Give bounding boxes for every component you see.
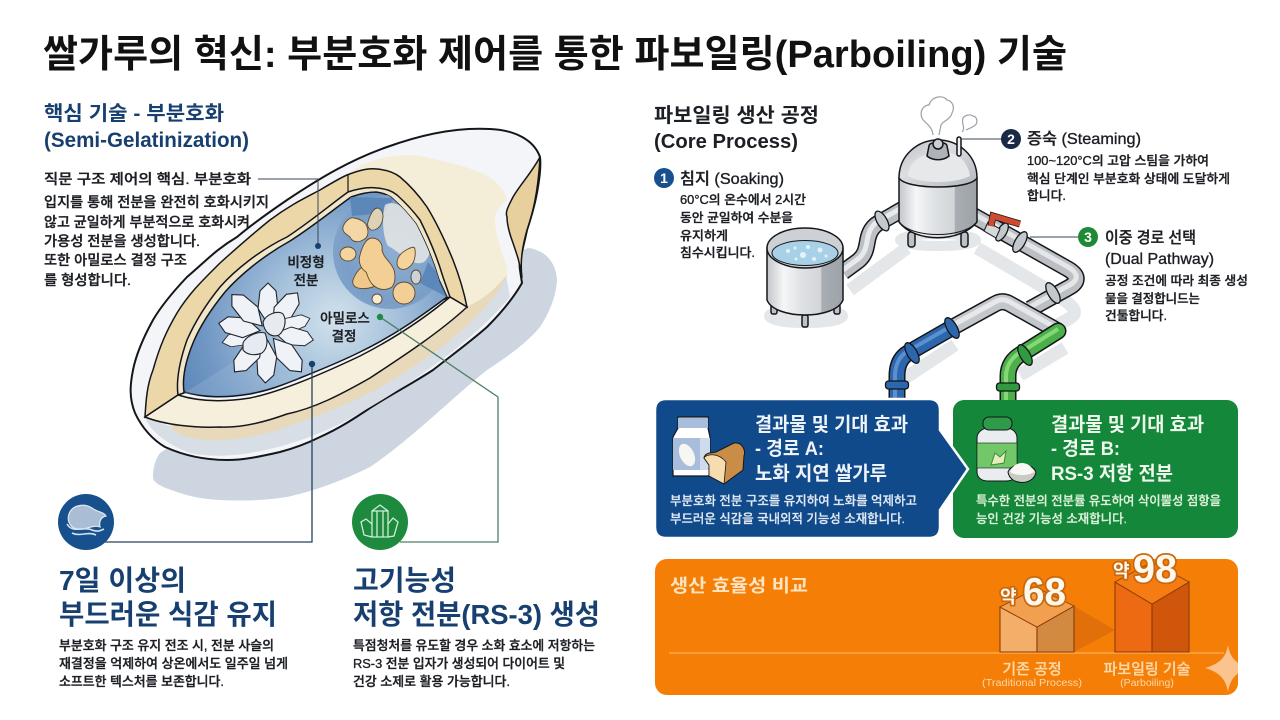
pathway A heading <box>755 414 908 485</box>
text block: resistant starch <box>353 638 595 689</box>
label: amorphous starch: 전분 <box>294 273 318 288</box>
pipe: soak to steam vessel <box>843 203 910 272</box>
text block: resistant starch: RS-3 전분 입자가 생성되어 다이어트 및 <box>353 656 565 671</box>
icon: starch wave <box>58 494 114 550</box>
value: 98 <box>1113 548 1177 591</box>
heading: soft texture <box>59 565 277 630</box>
step 3: dual pathway: 이중 경로 선택 <box>1105 229 1196 247</box>
pathway B heading: - 경로 B: <box>1051 438 1120 460</box>
panel: production efficiency comparison <box>655 548 1250 695</box>
pathway B description: 특수한 전분의 전분률 유도하여 삭이뿔성 점항을 <box>976 494 1221 508</box>
heading: core process: (Core Process) <box>654 131 798 153</box>
text block: semi-gelatinization description: 를 형성합니다. <box>44 272 131 288</box>
step 2: steaming <box>961 129 1230 203</box>
heading: soft texture: 부드러운 식감 유지 <box>59 599 277 630</box>
label: amorphous starch: 비정형 <box>287 255 325 270</box>
label: amylose crystal: 아밀로스 <box>320 311 370 326</box>
steam <box>921 97 977 135</box>
step 1: soaking: 60°C의 온수에서 2시간 <box>680 193 807 207</box>
panel heading: 생산 효율성 비교 <box>670 576 808 596</box>
step 2: steaming: 핵심 단계인 부분호화 상태에 도달하게 <box>1027 171 1230 186</box>
label: amylose crystal: 결정 <box>332 329 356 344</box>
illustration: rice grain cross-section <box>131 129 557 501</box>
label: traditional process <box>982 661 1082 689</box>
soaking tank <box>767 228 843 327</box>
step 2: steaming: 합니다. <box>1027 188 1066 203</box>
bar: traditional process <box>1000 588 1074 652</box>
heading: core technology <box>44 102 249 152</box>
text block: semi-gelatinization description: 또한 아밀로스 결정 구조 <box>44 252 187 268</box>
icon: green crystal <box>352 494 408 550</box>
heading: core process: 파보일링 생산 공정 <box>654 104 819 127</box>
step 2: steaming: 증숙 (Steaming) <box>1027 130 1141 148</box>
heading: resistant starch: 저항 전분(RS-3) 생성 <box>353 599 600 630</box>
pathway B heading: 결과물 및 기대 효과 <box>1051 414 1204 436</box>
sparkle <box>1205 645 1238 692</box>
step 1: soaking: 1 <box>660 170 668 186</box>
step 3: dual pathway: 3 <box>1084 229 1092 245</box>
pathway A heading: 결과물 및 기대 효과 <box>755 414 908 436</box>
label: traditional process: (Traditional Process) <box>982 677 1082 689</box>
heading: resistant starch: 고기능성 <box>353 565 456 596</box>
icon: milk carton and bread <box>673 417 745 484</box>
step 3: dual pathway: (Dual Pathway) <box>1105 251 1214 268</box>
pathway B heading: RS-3 저항 전분 <box>1051 463 1173 485</box>
title: 쌀가루의 혁신: 부분호화 제어를 통한 파보일링(Parboiling) 기술 <box>43 34 1067 76</box>
pathway B heading <box>1051 414 1204 485</box>
step 1: soaking <box>654 168 807 260</box>
icon: red valve <box>984 216 1020 238</box>
text block: soft texture: 소프트한 텍스처를 보존합니다. <box>59 674 224 689</box>
value: 98: 약 <box>1113 561 1130 581</box>
value: 98: 98 <box>1133 548 1177 591</box>
text block: semi-gelatinization description: 직문 구조 제어의 핵심. 부분호화 <box>44 171 251 187</box>
label: parboiling: (Parboiling) <box>1120 677 1174 689</box>
panel: pathway A result <box>655 399 968 538</box>
callout: leader to soft texture <box>105 361 315 542</box>
pipe: branch to blue route <box>895 300 1058 408</box>
heading: core process <box>654 104 819 153</box>
label: parboiling: 파보일링 기술 <box>1104 661 1191 678</box>
step 1: soaking: 동안 균일하여 수분을 <box>680 211 793 225</box>
pathway A description: 부분호화 전분 구조를 유지하여 노화를 억제하고 <box>670 494 917 508</box>
bar: parboiling <box>1115 562 1189 652</box>
amorphous starch bubble <box>333 195 447 309</box>
heading: soft texture: 7일 이상의 <box>59 565 186 596</box>
step 1: soaking: 침지 (Soaking) <box>680 170 784 188</box>
pipe: green route <box>1006 329 1058 408</box>
step 2: steaming: 100~120°C의 고압 스팀을 가하여 <box>1027 154 1209 168</box>
diagram: process equipment and pipes <box>767 97 1076 408</box>
step 1: soaking: 침수시킵니다. <box>680 246 755 260</box>
text block: soft texture: 부분호화 구조 유지 전조 시, 전분 사슬의 <box>59 638 274 653</box>
water sparkle <box>786 245 828 261</box>
step 3: dual pathway <box>1030 227 1248 323</box>
panel: pathway B result <box>953 400 1238 538</box>
label: traditional process: 기존 공정 <box>1002 661 1062 678</box>
pathway B description <box>976 494 1221 526</box>
pathway A description: 부드러운 식감을 국내외적 기능성 소재합니다. <box>670 511 905 526</box>
heading: resistant starch <box>353 565 600 630</box>
step 3: dual pathway: 물을 결정합니드는 <box>1105 291 1200 306</box>
step 2: steaming: 2 <box>1007 131 1015 147</box>
pipe flanges <box>872 191 1063 391</box>
label: amylose crystal <box>320 311 370 344</box>
pathway B description: 능인 건강 기능성 소재합니다. <box>976 511 1127 526</box>
label: parboiling <box>1104 661 1191 689</box>
heading: core technology: (Semi-Gelatinization) <box>44 129 249 152</box>
icon: supplement jar and powder <box>977 417 1036 482</box>
text block: semi-gelatinization description: 않고 균일하게 부분적으로 호화시켜 <box>44 214 250 230</box>
text block: semi-gelatinization description: 가용성 전분을 생성합니다. <box>44 233 200 249</box>
arrow between bars <box>1074 606 1115 652</box>
value: 68: 약 <box>1000 587 1017 607</box>
callout: leader to resistant starch <box>377 314 498 542</box>
heading: core technology: 핵심 기술 - 부분호화 <box>44 102 224 125</box>
step 1: soaking: 유지하게 <box>680 229 728 243</box>
value: 68: 68 <box>1023 571 1066 614</box>
text block: resistant starch: 건강 소제로 활용 가능합니다. <box>353 674 510 689</box>
pathway A heading: - 경로 A: <box>755 438 824 460</box>
callout: leader to amorphous starch <box>258 179 321 249</box>
step 3: dual pathway: 공정 조건에 따라 최종 생성 <box>1105 274 1248 288</box>
text block: resistant starch: 특점청처를 유도할 경우 소화 효소에 저항하는 <box>353 638 595 653</box>
text block: soft texture: 재결정을 억제하여 상온에서도 일주일 넘게 <box>59 656 288 671</box>
text block: semi-gelatinization description <box>44 171 269 288</box>
amylose crystal <box>217 283 315 383</box>
pathway A description <box>670 494 917 526</box>
step 3: dual pathway: 건툴합니다. <box>1105 308 1167 323</box>
label: amorphous starch <box>287 255 325 288</box>
pipe shadows <box>770 234 1074 378</box>
text block: soft texture <box>59 638 288 689</box>
value: 68 <box>1000 571 1066 614</box>
pipe: vessel to branch <box>967 210 1076 309</box>
steam vessel <box>899 137 977 247</box>
baseline <box>669 652 1224 654</box>
text block: semi-gelatinization description: 입지를 통해 전분을 완전히 호화시키지 <box>44 194 269 210</box>
pathway A heading: 노화 지연 쌀가루 <box>755 463 887 485</box>
